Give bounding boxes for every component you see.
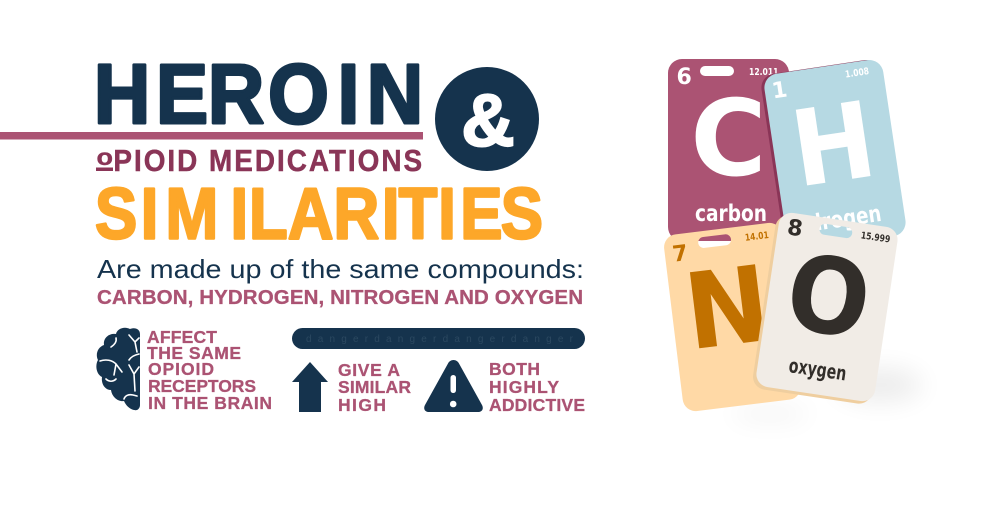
card: hydrogen: 1 bbox=[770, 77, 789, 104]
text: both highly addictive: HIGHLY bbox=[489, 377, 559, 397]
title: heroin: HEROIN bbox=[94, 48, 423, 142]
text: give a similar high: HIGH bbox=[338, 395, 386, 415]
text: affect the same opioid receptors: THE SAME bbox=[147, 343, 241, 363]
danger bar bbox=[292, 328, 585, 349]
card: nitrogen: 7 bbox=[671, 241, 689, 268]
subtitle: opioid medications: o bbox=[96, 144, 113, 170]
text: give a similar high bbox=[338, 360, 411, 415]
infographic canvas bbox=[0, 59, 914, 412]
ampersand badge bbox=[435, 67, 539, 171]
card: carbon bbox=[668, 59, 789, 241]
text: give a similar high: GIVE A bbox=[338, 360, 400, 380]
text: give a similar high: SIMILAR bbox=[338, 377, 411, 397]
text: affect the same opioid receptors: IN THE BRAIN bbox=[148, 393, 272, 413]
title: similarities: SIMILARITIES bbox=[95, 175, 543, 254]
text: both highly addictive bbox=[489, 359, 585, 415]
card ground shadow bbox=[730, 369, 922, 419]
icon: up arrow bbox=[292, 362, 328, 412]
card: hydrogen: H bbox=[784, 79, 883, 211]
card: carbon: 6 bbox=[676, 65, 692, 90]
card: hydrogen: hydrogen bbox=[782, 201, 883, 241]
title underline bbox=[0, 132, 423, 140]
card: carbon: carbon bbox=[695, 201, 767, 227]
icon: brain bbox=[96, 328, 140, 410]
card: carbon: C bbox=[690, 78, 766, 200]
card: carbon: 12.011 bbox=[749, 67, 778, 78]
card: hydrogen: 1.008 bbox=[844, 66, 870, 81]
statement: same compounds: Are made up of the same compounds: bbox=[97, 254, 584, 284]
text: affect the same opioid receptors: OPIOID bbox=[148, 359, 214, 379]
card shadow: hydrogen bbox=[760, 58, 904, 252]
icon: warning triangle bbox=[424, 360, 483, 412]
text: both highly addictive: BOTH bbox=[489, 359, 540, 379]
ampersand badge: & bbox=[461, 79, 515, 162]
card: nitrogen bbox=[663, 221, 802, 413]
danger bar: dangerdangerdangerdanger bbox=[306, 334, 574, 345]
text: both highly addictive: ADDICTIVE bbox=[489, 395, 585, 415]
card: hydrogen bbox=[762, 58, 907, 252]
compound list: CARBON, HYDROGEN, NITROGEN AND OXYGEN bbox=[97, 286, 583, 309]
text: affect the same opioid receptors: AFFECT bbox=[147, 327, 217, 347]
card: oxygen: 15.999 bbox=[860, 230, 891, 246]
card: oxygen: O bbox=[779, 231, 878, 363]
subtitle: opioid medications: PIOID MEDICATIONS bbox=[113, 144, 422, 178]
card: nitrogen: 14.01 bbox=[744, 230, 770, 244]
card: oxygen bbox=[751, 211, 899, 406]
card: oxygen: 8 bbox=[785, 215, 804, 242]
card: nitrogen: N bbox=[678, 243, 777, 374]
text: affect the same opioid receptors bbox=[147, 327, 272, 413]
card: oxygen: oxygen bbox=[787, 353, 848, 385]
text: affect the same opioid receptors: RECEPTORS bbox=[148, 376, 256, 396]
